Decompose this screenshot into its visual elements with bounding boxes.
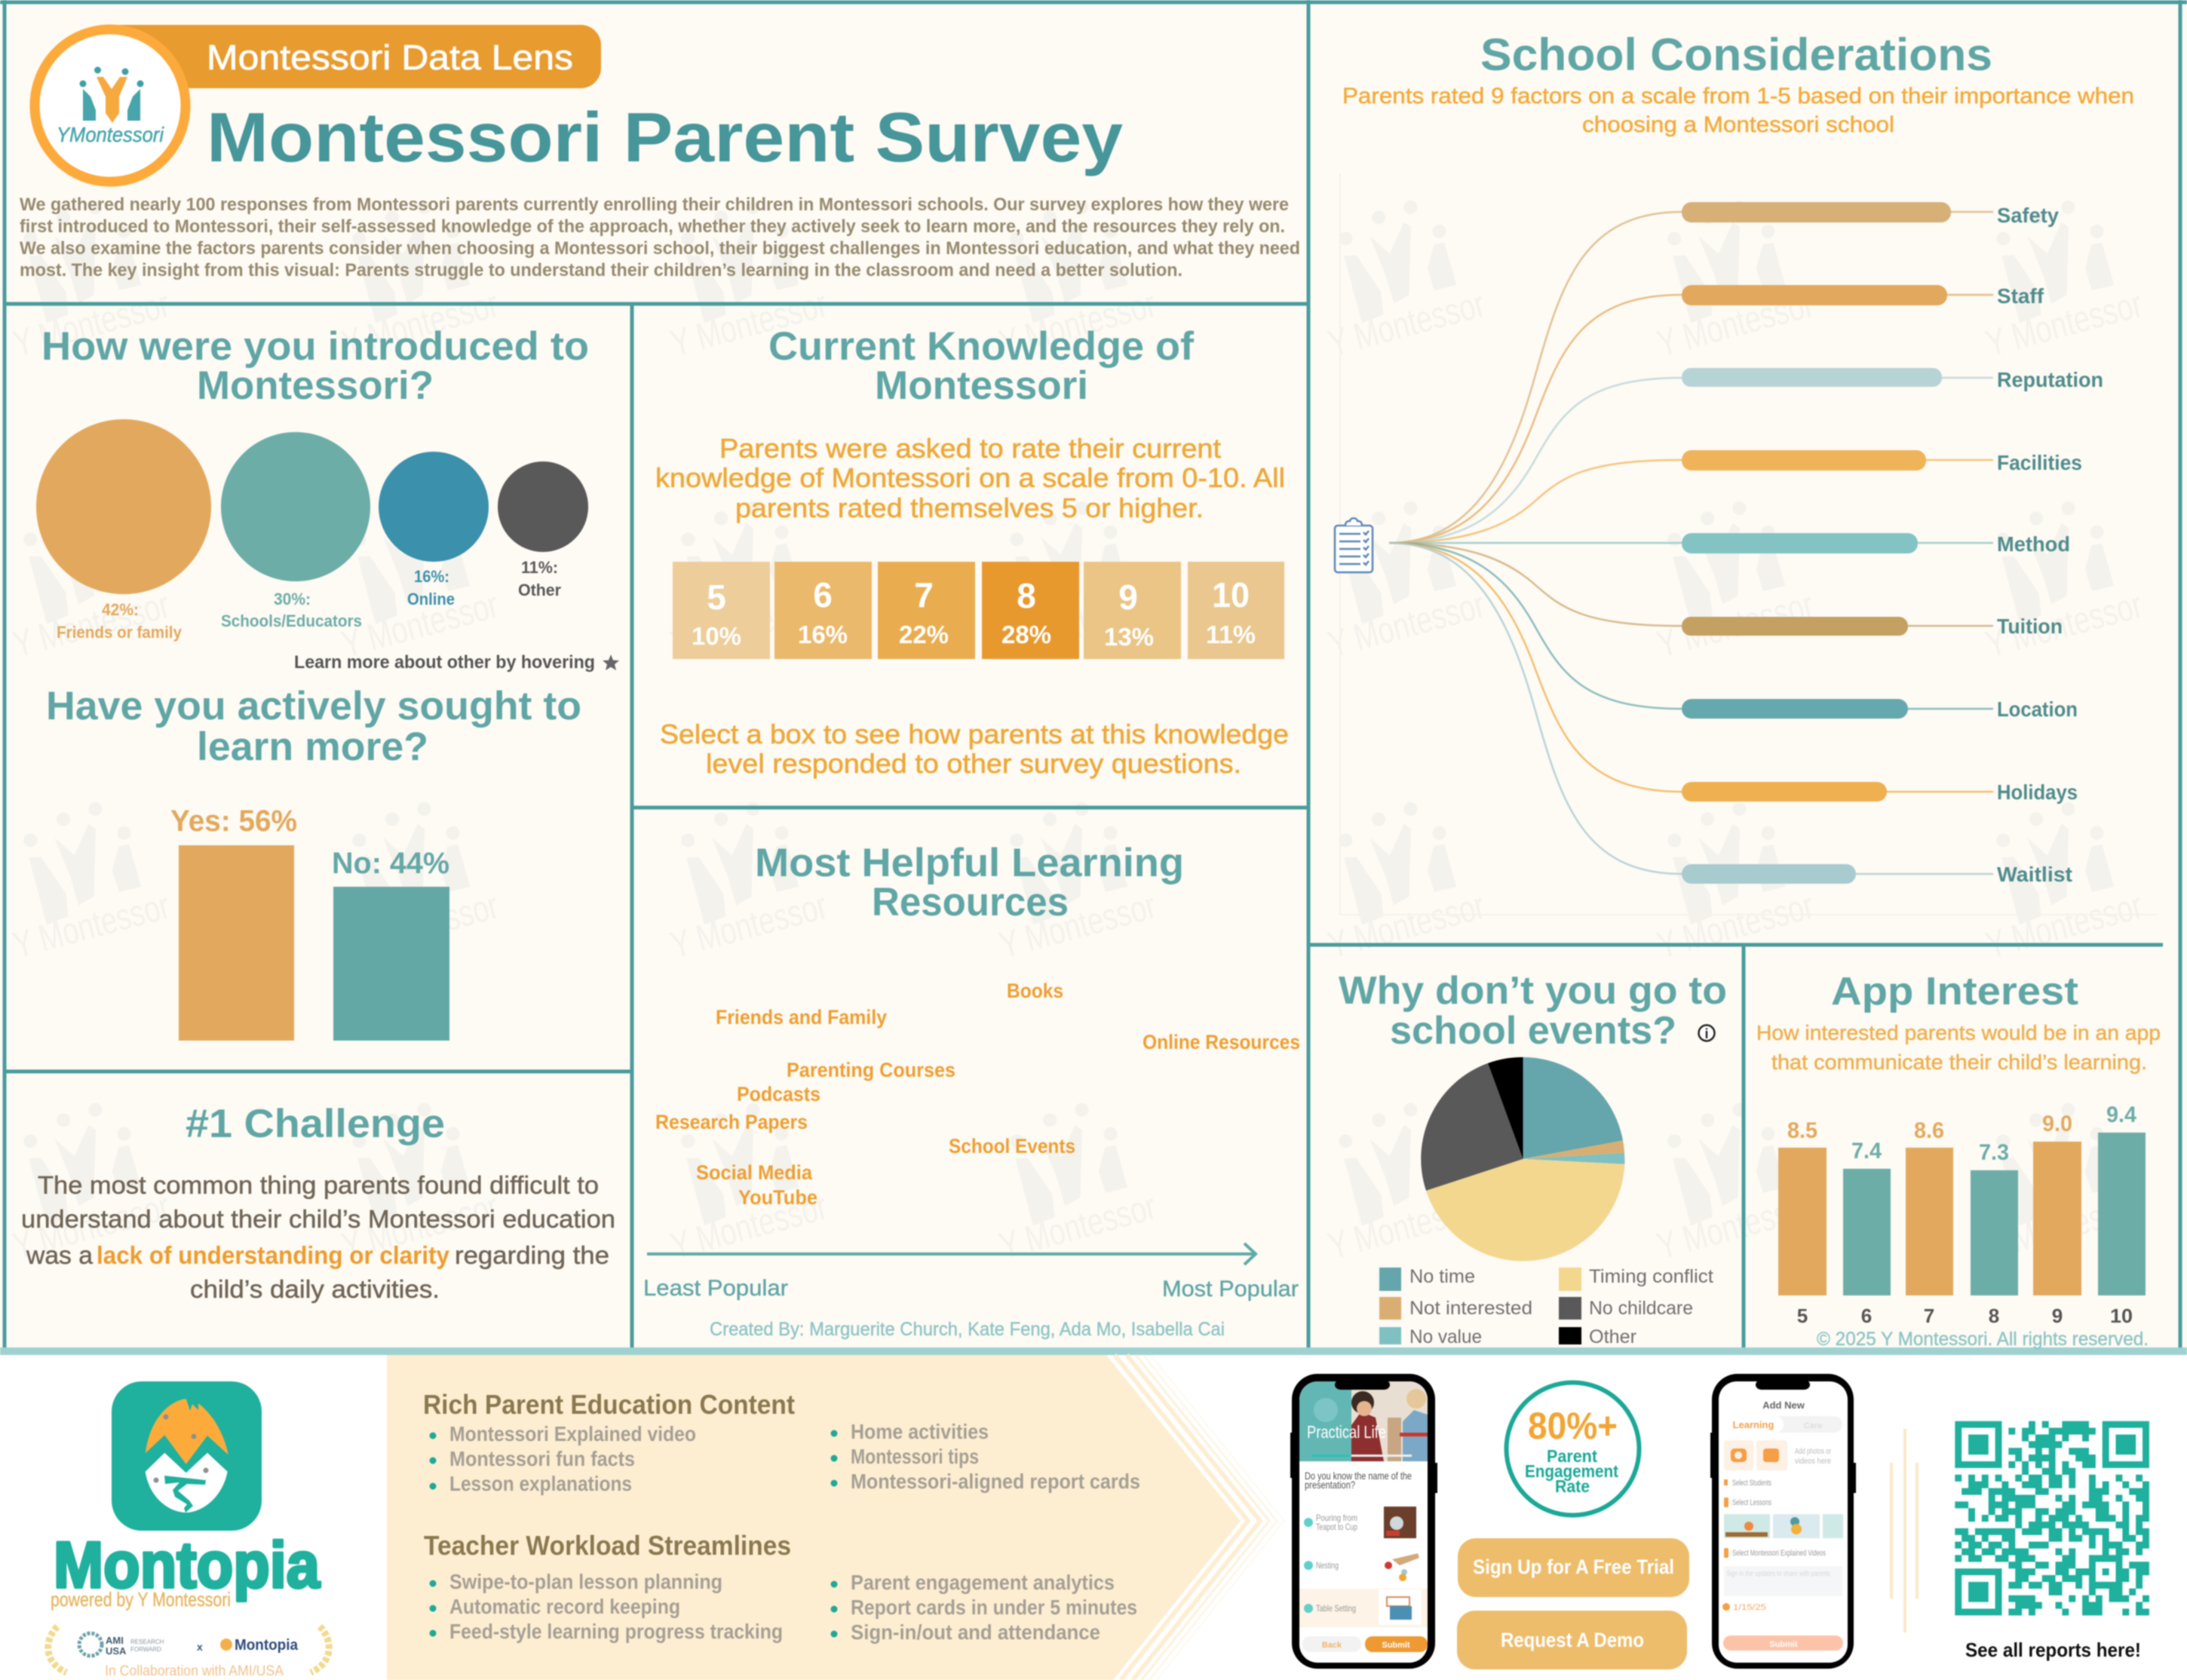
challenge text: was a (26, 1241, 94, 1269)
knowledge box: 5 (673, 562, 770, 659)
watermark pattern: Y Montessor (1324, 584, 1489, 666)
factor: Facilities (1389, 450, 2082, 543)
panel: header (20, 25, 1300, 281)
tagline: powered by Y Montessori (51, 1588, 231, 1611)
QR caption: See all reports here! (1965, 1639, 2141, 1661)
feature list: teacher workload streamlines: Swipe-to-plan lesson planning (449, 1570, 722, 1593)
feature list: rich parent education content: Rich Parent Education Content (423, 1389, 795, 1420)
icon: Y Montessori logo: YMontessori (57, 123, 164, 146)
phone mockup: add new screen: Learning (1733, 1419, 1774, 1430)
watermark pattern: Y Montessor (337, 584, 503, 666)
legend: Timing conflict (1589, 1266, 1713, 1287)
engagement rate badge: Rate (1555, 1476, 1590, 1496)
heading: How were you introduced to (41, 324, 589, 369)
panel: school considerations (1335, 29, 2157, 915)
factor: Holidays (1389, 543, 2078, 804)
arrow: popularity axis (647, 1243, 1256, 1265)
heading: Have you actively sought to (46, 684, 581, 728)
feature list: teacher workload streamlines: Feed-style learning progress tracking (449, 1620, 783, 1643)
panel: introduction to Montessori (36, 324, 619, 673)
bar: yes: Yes: 56% (170, 805, 297, 838)
bar: level 8: 8 (1989, 1304, 1999, 1327)
knowledge box: 6 (774, 562, 872, 659)
watermark pattern (8, 195, 2147, 1268)
factor: Reputation: Reputation (1997, 368, 2103, 391)
challenge text (21, 1171, 615, 1303)
intro text block (20, 195, 1300, 281)
QR code (1955, 1424, 2149, 1661)
watermark pattern: Y Montessor (8, 283, 174, 365)
description (1342, 84, 2134, 137)
phone mockup: add new screen: Care (1804, 1421, 1822, 1430)
watermark pattern: Y Montessor (337, 884, 503, 967)
word cloud: Social Media (696, 1161, 813, 1184)
intro text block: We gathered nearly 100 responses from Montessori parents currently enrolling their children in Montessori schools. Our survey explores how they were (20, 195, 1289, 215)
factor: Staff (1389, 284, 2044, 543)
factor: Holidays: Holidays (1997, 780, 2078, 804)
selection hint: level responded to other survey questions. (706, 748, 1241, 779)
watermark pattern: Y Montessor (666, 283, 832, 365)
watermark pattern: Y Montessor (1324, 283, 1489, 365)
collaboration badge: FORWARD (130, 1646, 161, 1653)
phone mockup: lesson screen: Table Setting (1316, 1603, 1356, 1614)
feature list: teacher workload streamlines: Parent engagement analytics (851, 1571, 1115, 1594)
factor: Facilities: Facilities (1997, 451, 2082, 474)
word cloud: Research Papers (655, 1111, 808, 1133)
knowledge box: 5: 5 (707, 578, 726, 617)
collaboration badge: AMI (106, 1635, 124, 1646)
description: Parents were asked to rate their current (719, 433, 1221, 464)
bar: level 5: 8.5 (1787, 1118, 1817, 1143)
bubble: online: Online (407, 590, 455, 609)
factor: Tuition: Tuition (1997, 615, 2063, 638)
feature list: rich parent education content: Montessori Explained video (449, 1422, 696, 1445)
bubble: schools/educators: Schools/Educators (221, 612, 362, 630)
legend: Other (1589, 1326, 1636, 1347)
credits: Created By: Marguerite Church, Kate Feng, Ada Mo, Isabella Cai (710, 1319, 1225, 1340)
feature list: rich parent education content: Home activities (851, 1420, 989, 1443)
feature list: teacher workload streamlines: Sign-in/out and attendance (851, 1620, 1100, 1644)
challenge text: The most common thing parents found difficult to (38, 1171, 599, 1199)
phone mockup: lesson screen: presentation? (1305, 1479, 1355, 1491)
heading: Current Knowledge of (768, 324, 1194, 369)
feature list: rich parent education content: Lesson explanations (449, 1472, 632, 1495)
bar: level 5 (1778, 1118, 1827, 1327)
phone mockup: add new screen: Add photos or (1795, 1447, 1831, 1456)
brand block: Montopia (48, 1381, 329, 1679)
phone mockup: add new screen: videos here (1795, 1457, 1831, 1466)
watermark pattern: Y Montessor (1652, 584, 1818, 666)
engagement rate badge (1507, 1383, 1639, 1516)
bubble: schools/educators: 30%: (274, 590, 311, 609)
knowledge box: 7 (878, 562, 975, 659)
legend: No childcare (1589, 1298, 1693, 1319)
bubble: friends or family: Friends or family (57, 623, 183, 642)
bubble: online: 16%: (414, 567, 449, 586)
bar: no (332, 847, 449, 1041)
phone mockup: lesson screen: Teapot to Cup (1316, 1522, 1357, 1532)
collaboration badge: RESEARCH (130, 1639, 164, 1645)
watermark pattern: Y Montessor (666, 884, 832, 967)
phone mockup: add new screen: Select Montessori Explained Videos (1732, 1549, 1826, 1558)
phone mockup: add new screen: Select Lessons (1732, 1498, 1771, 1507)
panel: Montopia promo strip (0, 1355, 2187, 1680)
knowledge box: 8: 28% (1001, 621, 1051, 648)
engagement rate badge: Engagement (1525, 1461, 1618, 1481)
description: parents rated themselves 5 or higher. (735, 492, 1204, 523)
phone mockup: add new screen: Sign in the updates to share with parents (1726, 1570, 1830, 1578)
description: How interested parents would be in an app (1756, 1021, 2161, 1044)
intro text block: most. The key insight from this visual: Parents struggle to understand their children’s learning in the classroom and need a better solution. (20, 260, 1182, 281)
bar: level 9: 9 (2052, 1304, 2063, 1327)
phone mockup: lesson screen: Do you know the name of the (1305, 1470, 1412, 1482)
panel: #1 challenge (21, 1102, 615, 1303)
bubble: online (379, 452, 489, 609)
button: request demo: Request A Demo (1501, 1629, 1644, 1651)
knowledge box: 10 (1188, 562, 1284, 659)
bar: level 8 (1971, 1140, 2018, 1327)
bar: level 6 (1843, 1139, 1891, 1327)
heading: Resources (872, 880, 1069, 924)
word cloud: Podcasts (737, 1083, 821, 1105)
description: choosing a Montessori school (1582, 112, 1894, 137)
legend: No value (1409, 1326, 1482, 1347)
word cloud: School Events (949, 1135, 1075, 1157)
phone mockup: add new screen: Select Students (1732, 1479, 1771, 1488)
heading: school events? (1390, 1009, 1676, 1053)
collaboration badge: In Collaboration with AMI/USA (105, 1663, 284, 1679)
hover hint with star: Learn more about other by hovering (294, 652, 595, 673)
heading: Most Helpful Learning (755, 841, 1184, 885)
banner: Montessori Data Lens: Montessori Data Lens (207, 38, 573, 77)
banner: Montessori Data Lens (113, 25, 601, 88)
watermark pattern: Y Montessor (1324, 1185, 1489, 1268)
axis label: least popular: Least Popular (643, 1276, 788, 1301)
bar: level 8: 7.3 (1979, 1140, 2009, 1165)
icon: Y Montessori logo (35, 29, 186, 182)
button: request demo (1457, 1611, 1687, 1669)
bar: level 10: 9.4 (2106, 1102, 2136, 1127)
watermark pattern: Y Montessor (8, 884, 174, 967)
icon: Montopia egg app icon (112, 1381, 262, 1531)
panel: current knowledge (655, 324, 1289, 779)
bar chart: interest by knowledge level (1778, 1102, 2146, 1327)
factor: Location (1389, 543, 2078, 721)
heading: #1 Challenge (186, 1102, 445, 1146)
bar: level 7: 7 (1924, 1304, 1934, 1327)
heading: Montessori (875, 363, 1088, 408)
word cloud: Friends and Family (716, 1006, 887, 1029)
factor: Staff: Staff (1997, 284, 2044, 308)
bubble: friends or family: 42%: (102, 600, 139, 619)
intro text block: We also examine the factors parents consider when choosing a Montessori school, their biggest challenges in Montessori education, and what they need (20, 238, 1300, 259)
word cloud: Parenting Courses (787, 1059, 955, 1081)
word cloud: Books (1007, 979, 1063, 1002)
collaboration badge: USA (106, 1645, 127, 1657)
heading (1339, 969, 1727, 1053)
challenge text: lack of understanding or clarity (97, 1241, 450, 1269)
feature list: teacher workload streamlines: Teacher Workload Streamlines (424, 1530, 791, 1561)
watermark pattern: Y Montessor (666, 584, 832, 666)
decorative vertical lines (1891, 1429, 1917, 1632)
heading: Montessori? (197, 363, 434, 408)
feature list: rich parent education content: Montessori tips (851, 1445, 979, 1468)
bar: level 6: 6 (1861, 1304, 1872, 1327)
heading: App Interest (1831, 970, 2078, 1013)
panel: most helpful learning resources (643, 841, 1300, 1340)
word cloud (655, 979, 1300, 1209)
description (1756, 1021, 2161, 1074)
knowledge box: 8: 8 (1017, 576, 1036, 615)
bar: level 9 (2033, 1111, 2081, 1327)
selection hint (660, 719, 1289, 779)
watermark pattern: Y Montessor (995, 1185, 1161, 1268)
copyright: © 2025 Y Montessori. All rights reserved. (1817, 1329, 2149, 1350)
watermark pattern: Y Montessor (1652, 1185, 1818, 1268)
knowledge box: 9: 9 (1118, 578, 1138, 617)
feature list: teacher workload streamlines (424, 1530, 1137, 1644)
watermark pattern: Y Montessor (1324, 884, 1489, 967)
icon: info (1698, 1025, 1715, 1041)
axis label: most popular: Most Popular (1162, 1277, 1299, 1301)
phone mockup: add new screen: 1/15/25 (1733, 1603, 1766, 1612)
knowledge box: 9 (1084, 562, 1181, 659)
factor: Method (1389, 532, 2070, 556)
factor: Safety (1389, 202, 2059, 543)
heading (46, 684, 581, 769)
panel: why don't you go to school events (1339, 969, 1727, 1347)
word cloud: Online Resources (1143, 1031, 1300, 1053)
knowledge box: 6: 6 (813, 575, 833, 615)
knowledge box: 7: 7 (914, 575, 934, 615)
bar: level 9: 9.0 (2042, 1111, 2072, 1136)
watermark pattern: Y Montessor (337, 283, 503, 365)
watermark pattern: Y Montessor (1652, 884, 1818, 967)
phone mockup: lesson screen: Pouring from (1316, 1513, 1357, 1523)
chart: considerations sigmoid bars (1389, 202, 2103, 886)
watermark pattern: Y Montessor (337, 1185, 503, 1268)
icon: clipboard (1335, 518, 1373, 572)
knowledge box: 7: 22% (899, 621, 949, 648)
description (655, 433, 1285, 523)
feature list: teacher workload streamlines: Report cards in under 5 minutes (851, 1596, 1137, 1619)
challenge text: child’s daily activities. (190, 1275, 440, 1303)
bar: level 6: 7.4 (1851, 1139, 1882, 1163)
factor: Waitlist (1389, 543, 2072, 886)
phone mockup: lesson screen (1290, 1374, 1437, 1669)
bar: level 10: 10 (2110, 1304, 2133, 1327)
knowledge box: 8 (982, 562, 1079, 659)
selection hint: Select a box to see how parents at this knowledge (660, 719, 1289, 750)
watermark pattern: Y Montessor (995, 884, 1161, 967)
bubble: other (498, 461, 588, 599)
feature list: rich parent education content: Montessori-aligned report cards (851, 1470, 1140, 1493)
icon: info: i (1704, 1026, 1709, 1041)
intro text block: first introduced to Montessori, their self-assessed knowledge of the approach, whether they actively seek to learn more, and the resources they rely on. (20, 216, 1285, 237)
button: sign up (1458, 1538, 1689, 1597)
knowledge box: 9: 13% (1104, 623, 1154, 651)
bar: level 7: 8.6 (1914, 1118, 1944, 1143)
feature arrow panel (387, 1355, 1284, 1680)
bar: no: No: 44% (332, 847, 449, 880)
watermark pattern: Y Montessor (1652, 283, 1818, 365)
watermark pattern: Y Montessor (8, 584, 174, 666)
title: Montessori Parent Survey (207, 98, 1123, 176)
bar: level 7 (1906, 1118, 1953, 1327)
button: sign up: Sign Up for A Free Trial (1473, 1556, 1674, 1578)
heading: School Considerations (1480, 29, 1992, 80)
collaboration badge: Montopia (235, 1637, 299, 1654)
challenge text: regarding the (455, 1241, 609, 1269)
knowledge box: 10: 11% (1206, 621, 1256, 648)
watermark pattern: Y Montessor (995, 584, 1161, 666)
collaboration badge (48, 1626, 329, 1679)
knowledge box: 10: 10 (1212, 575, 1250, 615)
watermark pattern: Y Montessor (8, 1185, 174, 1268)
challenge text: understand about their child’s Montessori education (21, 1205, 615, 1233)
wordmark: Montopia (54, 1529, 321, 1602)
description: that communicate their child’s learning. (1771, 1050, 2147, 1074)
phone mockup: add new screen: Add New (1762, 1399, 1805, 1411)
bubble: other: 11%: (521, 558, 558, 577)
description: Parents rated 9 factors on a scale from 1-5 based on their importance when (1342, 84, 2134, 109)
phone mockup: lesson screen: Back (1322, 1641, 1342, 1650)
phone mockup: lesson screen: Submit (1382, 1641, 1410, 1650)
phone mockup: lesson screen: Nesting (1316, 1560, 1339, 1571)
watermark pattern: Y Montessor (995, 283, 1161, 365)
word cloud: YouTube (738, 1186, 817, 1209)
knowledge box: 6: 16% (798, 621, 848, 648)
bubble: friends or family (36, 419, 211, 642)
heading (41, 324, 589, 408)
panel: actively sought to learn more (46, 684, 581, 1041)
description: knowledge of Montessori on a scale from 0-10. All (655, 462, 1285, 493)
engagement rate badge: Parent (1547, 1446, 1597, 1466)
feature list: rich parent education content (423, 1389, 1140, 1495)
bubble: other: Other (518, 581, 561, 599)
factor: Method: Method (1997, 532, 2070, 556)
collaboration badge: x (197, 1641, 203, 1653)
factor: Location: Location (1997, 697, 2078, 721)
factor: Waitlist: Waitlist (1997, 863, 2072, 886)
heading: learn more? (197, 725, 428, 769)
heading (768, 324, 1194, 408)
pie chart (1421, 1057, 1624, 1261)
factor: Safety: Safety (1997, 204, 2059, 227)
bubble: schools/educators (221, 432, 370, 630)
phone mockup: lesson screen: Practical Life (1307, 1422, 1386, 1442)
heading (755, 841, 1184, 924)
phone mockup: add new screen (1710, 1374, 1856, 1669)
factor: Reputation (1389, 368, 2103, 543)
legend: Not interested (1409, 1298, 1532, 1319)
factor: Tuition (1389, 543, 2063, 638)
bar: level 10 (2098, 1102, 2146, 1327)
feature list: teacher workload streamlines: Automatic record keeping (449, 1595, 680, 1618)
heading: Why don’t you go to (1339, 969, 1727, 1013)
watermark pattern: Y Montessor (666, 1185, 832, 1268)
bar: level 5: 5 (1797, 1304, 1808, 1327)
bar: yes (170, 805, 297, 1041)
panel: app interest (1756, 970, 2161, 1350)
knowledge box: 5: 10% (692, 622, 741, 650)
feature list: rich parent education content: Montessori fun facts (449, 1447, 635, 1470)
legend (1379, 1266, 1713, 1347)
phone mockup: add new screen: Submit (1769, 1640, 1798, 1649)
engagement rate badge: 80%+ (1528, 1405, 1618, 1447)
legend: No time (1409, 1266, 1475, 1287)
